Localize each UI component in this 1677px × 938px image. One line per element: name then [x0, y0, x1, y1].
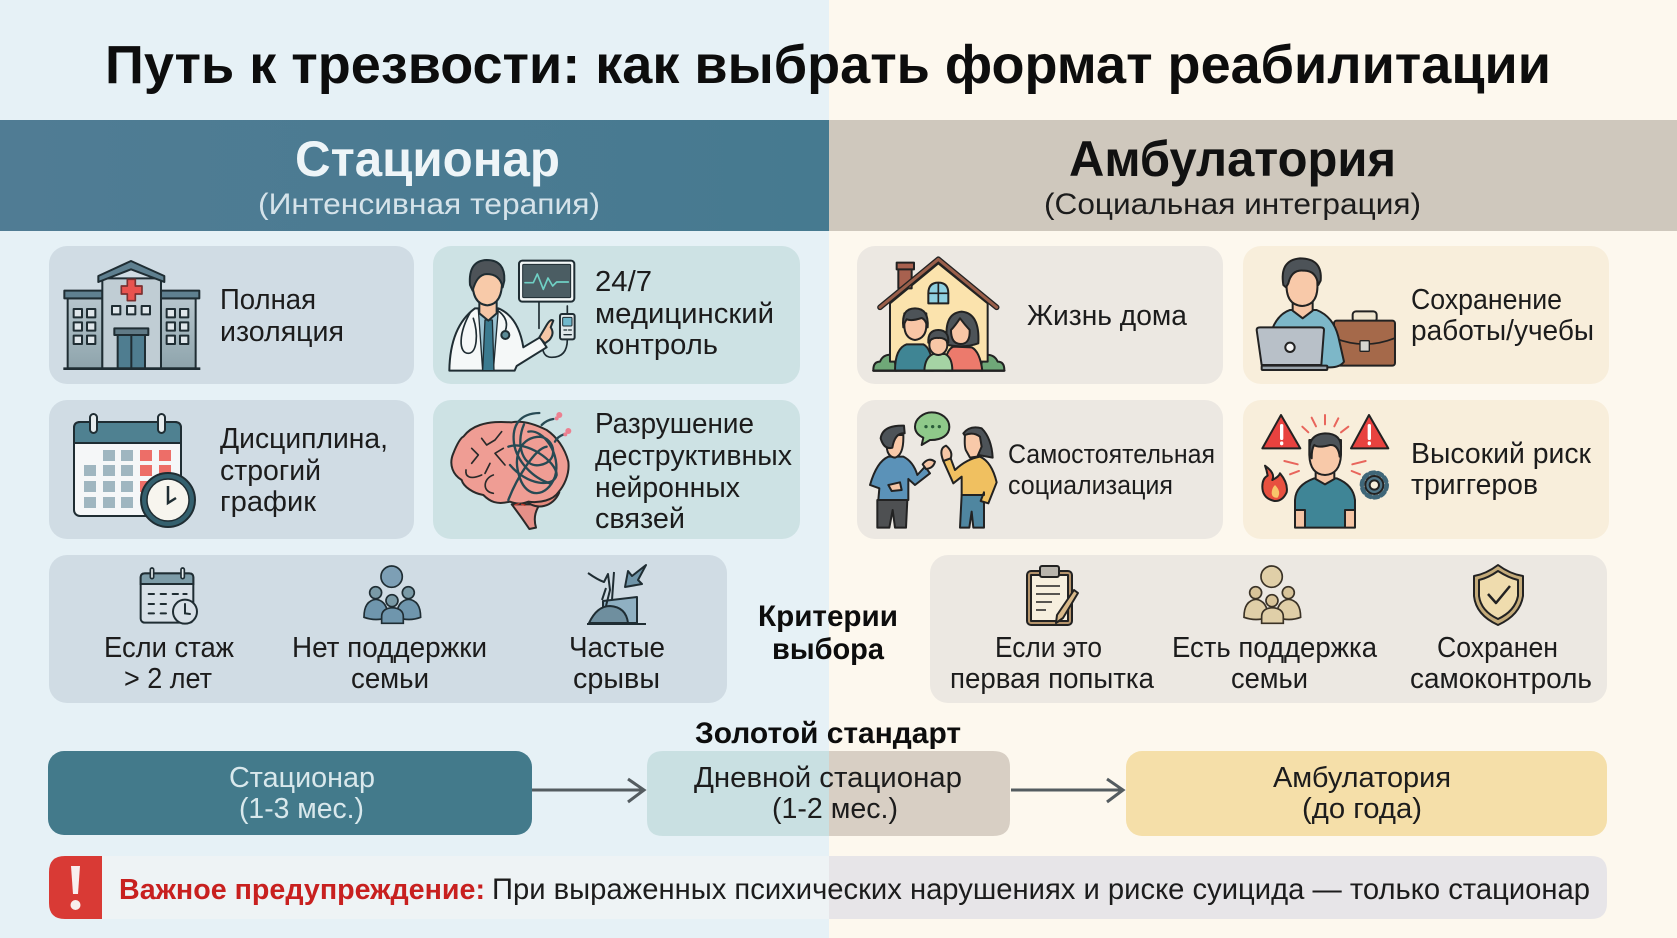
background: right half	[829, 0, 1677, 938]
icon: calendar with clock	[74, 414, 195, 527]
text: Есть поддержка семьи: Есть поддержка	[1172, 632, 1378, 664]
text: Дисциплина, строгий график: Дисциплина,	[220, 423, 388, 455]
text: Высокий риск триггеров: триггеров	[1411, 469, 1538, 501]
step: Стационар 1-3 мес.	[48, 751, 532, 835]
panel: Высокий риск триггеров	[1243, 400, 1609, 539]
text: Разрушение деструктивных нейронных связей: Разрушение	[595, 408, 754, 440]
step: Амбулатория до года	[1126, 751, 1607, 836]
text: Частые срывы: Частые	[569, 632, 665, 664]
text: Самостоятельная социализация: социализация	[1008, 470, 1173, 500]
step: Дневной стационар 1-2 мес.: Дневной стационар	[694, 762, 962, 794]
panel: Жизнь дома	[857, 246, 1223, 384]
heading: Критерии выбора: Критерии	[758, 600, 898, 633]
step: Стационар 1-3 мес.: Стационар	[229, 762, 375, 794]
step: Амбулатория до года: Амбулатория	[1273, 762, 1451, 794]
text: Если стаж > 2 лет	[104, 632, 235, 695]
panel: Полная изоляция	[49, 246, 414, 384]
text: Дисциплина, строгий график: строгий	[220, 455, 321, 487]
text: Нет поддержки семьи: семьи	[351, 663, 429, 695]
text: Сохранение работы/учебы	[1411, 284, 1594, 347]
text: Если это первая попытка: первая попытка	[950, 663, 1155, 695]
icon: house with family	[873, 259, 1004, 371]
warning bar	[49, 856, 1607, 919]
text: 24/7 медицинский контроль: 24/7	[595, 266, 652, 298]
icon: hospital	[63, 261, 200, 369]
heading: Критерии выбора	[758, 600, 898, 666]
text: Высокий риск триггеров	[1411, 438, 1591, 501]
panel: criteria for outpatient	[930, 555, 1607, 703]
text: Есть поддержка семьи	[1172, 632, 1378, 695]
text: Самостоятельная социализация	[1008, 439, 1215, 500]
text: Если это первая попытка: Если это	[995, 632, 1102, 664]
text: Полная изоляция: изоляция	[220, 316, 344, 348]
step: Дневной стационар 1-2 мес.	[647, 751, 1010, 836]
step: Стационар 1-3 мес.: (1-3 мес.)	[239, 793, 364, 825]
header: Амбулатория: Амбулатория	[1069, 131, 1396, 187]
text: Высокий риск триггеров: Высокий риск	[1411, 438, 1591, 470]
panel: Разрушение связей	[433, 400, 800, 539]
header: Стационар: Стационар	[295, 131, 560, 187]
icon: doctor with monitor	[449, 260, 575, 371]
text: 24/7 медицинский контроль: медицинский	[595, 298, 774, 330]
text: Если стаж > 2 лет: > 2 лет	[124, 663, 212, 695]
text: Жизнь дома: Жизнь дома	[1027, 300, 1188, 332]
text: Если стаж > 2 лет: Если стаж	[104, 632, 235, 664]
text: warning message: Важное предупреждение:	[119, 874, 485, 906]
text: Разрушение деструктивных нейронных связей	[595, 408, 792, 535]
icon: two people talking	[870, 412, 997, 528]
header: Стационар	[0, 120, 829, 231]
icon: brain with tangled wires	[451, 412, 571, 529]
icon: small calendar	[141, 568, 197, 624]
text: Сохранен самоконтроль: Сохранен	[1437, 632, 1558, 664]
text: Нет поддержки семьи: Нет поддержки	[292, 632, 487, 664]
panel: 24/7 контроль	[433, 246, 800, 384]
text: Разрушение деструктивных нейронных связей: нейронных	[595, 472, 740, 504]
text: Частые срывы: срывы	[573, 663, 660, 695]
text: 24/7 медицинский контроль: контроль	[595, 329, 718, 361]
header: Амбулатория	[829, 120, 1677, 231]
icon: clipboard	[1027, 566, 1078, 625]
icon: shield	[1474, 565, 1523, 625]
step: Дневной стационар 1-2 мес.: (1-2 мес.)	[772, 793, 898, 825]
icon: supportive family	[1244, 566, 1301, 623]
text: Самостоятельная социализация: Самостоятельная	[1008, 439, 1215, 469]
text: Есть поддержка семьи: семьи	[1231, 663, 1308, 695]
text: Если это первая попытка	[950, 632, 1155, 695]
text: Сохранен самоконтроль: самоконтроль	[1410, 663, 1592, 695]
text: Частые срывы	[569, 632, 665, 695]
panel: Сохранение работы	[1243, 246, 1609, 384]
panel: criteria for inpatient	[49, 555, 727, 703]
text: Сохранен самоконтроль	[1410, 632, 1592, 695]
text: Полная изоляция: Полная	[220, 284, 316, 316]
background: left half	[0, 0, 829, 938]
text: Нет поддержки семьи	[292, 632, 487, 695]
heading: Золотой стандарт: Золотой стандарт	[695, 717, 961, 750]
icon: person with laptop and briefcase	[1257, 258, 1395, 370]
text: Сохранение работы/учебы: Сохранение	[1411, 284, 1562, 316]
text: 24/7 медицинский контроль	[595, 266, 774, 361]
arrow: to day hospital	[532, 779, 644, 802]
text: Разрушение деструктивных нейронных связей: связей	[595, 503, 685, 535]
panel: Дисциплина	[49, 400, 414, 539]
panel: Самостоятельная социализация	[857, 400, 1223, 539]
text: Дисциплина, строгий график: график	[220, 486, 316, 518]
text: Разрушение деструктивных нейронных связей: деструктивных	[595, 440, 792, 472]
icon: broken relapse	[587, 565, 646, 624]
text: Дисциплина, строгий график	[220, 423, 388, 518]
step: Амбулатория до года: (до года)	[1302, 793, 1422, 825]
header: Амбулатория: (Социальная интеграция)	[1044, 188, 1421, 221]
icon: person with warnings	[1262, 415, 1388, 528]
icon: warning exclamation	[49, 856, 102, 919]
heading: Критерии выбора: выбора	[772, 633, 884, 666]
header: Стационар: (Интенсивная терапия)	[258, 188, 600, 221]
arrow: to outpatient	[1011, 779, 1123, 802]
text: warning message: При выраженных психических нарушениях и риске суицида — только стационар	[492, 873, 1590, 906]
text: Сохранение работы/учебы: работы/учебы	[1411, 315, 1594, 347]
text: Полная изоляция	[220, 284, 344, 348]
title: Путь к трезвости: как выбрать формат реабилитации	[105, 35, 1551, 95]
icon: family group	[364, 566, 421, 623]
